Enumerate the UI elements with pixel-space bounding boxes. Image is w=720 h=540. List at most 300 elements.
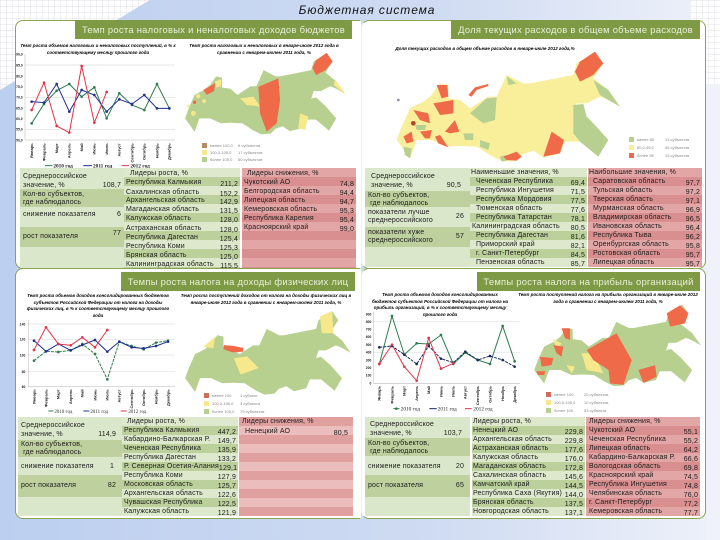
row header: Лидеры снижения, % (589, 418, 661, 425)
table: decline leaders: 99,0 (340, 226, 354, 232)
line chart: tax revenue growth by month: 60,0 (16, 117, 23, 121)
line chart: personal income tax by month: Январь (31, 389, 36, 404)
table: growth leaders: 127,9 (218, 474, 236, 480)
table: lowest values: г. Санкт-Петербург (476, 250, 539, 257)
table: highest values: 96,5 (686, 216, 700, 222)
table: growth leaders: Республика Коми (124, 472, 183, 479)
line chart: personal income tax by month: 2012 год (128, 410, 147, 415)
table: growth leaders: 176,0 (565, 456, 583, 462)
map: corporate profit tax by region (534, 305, 701, 386)
table: decline leaders (586, 417, 700, 516)
stat: growth count: 82 (108, 482, 116, 489)
line chart: personal income tax by month: Ноябрь (153, 389, 158, 404)
legend: tax revenue map: 60 субъектов (238, 157, 262, 162)
line chart: personal income tax by month: 2010 год (54, 410, 73, 415)
table: lowest values (470, 168, 587, 267)
line chart: tax revenue growth by month: Сентябрь (129, 143, 134, 162)
table: lowest values: Республика Татарстан (476, 214, 552, 221)
table: growth leaders: Астраханская область (126, 225, 202, 232)
line chart: corporate profit tax by month: 2011 год (438, 406, 457, 412)
table: highest values: Ростовская область (593, 250, 660, 257)
line chart: tax revenue growth by month: 55,0 (16, 128, 23, 132)
stat: regions observed: где наблюдалось (370, 200, 428, 207)
table: growth leaders: Брянская область (473, 499, 534, 506)
line chart: personal income tax by month: Сентябрь (129, 389, 134, 408)
table: growth leaders: 145,6 (565, 474, 583, 480)
stat: national average: 114,9 (98, 431, 116, 438)
legend: expenditure map: 13 субъектов (665, 137, 689, 142)
line chart: personal income tax by month: Февраль (43, 389, 48, 407)
line chart: corporate profit tax by month: Июль (451, 385, 456, 397)
line chart: personal income tax by month: 80 (22, 370, 25, 374)
table: growth leaders: Кабардино-Балкарская Р. (124, 436, 210, 443)
table: growth leaders (472, 417, 585, 516)
panel: personal income tax (15, 268, 361, 519)
table: growth leaders: Республика Коми (126, 243, 185, 250)
legend: personal income tax map (204, 393, 264, 414)
table: growth leaders: Сахалинская область (473, 472, 546, 479)
table: decline leaders: Чукотский АО (244, 179, 290, 186)
table: expenditure summary (365, 168, 470, 267)
table: highest values: Ивановская область (593, 223, 662, 230)
stat: growth count: 65 (456, 482, 464, 489)
row header: Наименьшие значения, % (471, 169, 559, 176)
table: growth leaders: Калужская область (126, 215, 191, 222)
stat: better than average: показатели лучше (368, 209, 430, 216)
legend: expenditure map: 55 субъектов (665, 145, 689, 150)
heading: current expenditure share (451, 20, 700, 39)
line chart: corporate profit tax by month: 700 (366, 328, 371, 332)
line chart: personal income tax by month: Май (80, 389, 85, 397)
table: decline leaders: Челябинская область (589, 490, 662, 497)
table: highest values: Республика Тыва (593, 232, 652, 239)
table: growth leaders: Калининградская область (126, 261, 214, 268)
line chart: corporate profit tax by month: 2012 год (473, 406, 493, 412)
table: decline leaders: Ненецкий АО (245, 428, 290, 435)
table: growth leaders: 129,1 (219, 464, 237, 472)
table: growth leaders: Республика Калмыкия (126, 179, 201, 186)
line chart: corporate profit tax by month: 600 (366, 335, 371, 339)
table: decline leaders: 76,0 (684, 492, 698, 498)
table: decline leaders: Кемеровская область (244, 206, 317, 213)
line chart: corporate profit tax by month: 2010 год (401, 406, 420, 412)
table: lowest values: Калининградская область (472, 223, 560, 230)
legend: personal income tax map: более 105,0 (212, 409, 235, 414)
stat: regions observed: где наблюдалось (23, 449, 81, 456)
table: growth leaders: Калужская область (473, 454, 538, 461)
table: highest values: 97,1 (686, 198, 700, 204)
line chart: corporate profit tax by month: 800 (366, 320, 371, 324)
stat: national average: Среднероссийское (370, 421, 434, 428)
legend: tax revenue map: 6 субъектов (238, 143, 260, 148)
line chart: corporate profit tax by month: Февраль (389, 385, 394, 404)
table: lowest values: Тюменская область (476, 205, 543, 212)
text: map subtitle bottom left: Темп роста поступлений доходов от налога на доходы физических лиц в январе-июле 2012 года в сравнении с январем-июлем 2011 года, % (181, 293, 351, 305)
table: growth leaders: Архангельская область (126, 197, 205, 204)
table: growth leaders: 128,0 (220, 216, 238, 224)
text: chart subtitle bottom right: Темп роста объемов доходов консолидированных бюджетов субъектов Российской Федерации от налога на прибыль организаций, в % к соответствующему месяцу прошлого года (372, 292, 508, 317)
table: decline leaders: Республика Ингушетия (589, 481, 667, 488)
table: growth leaders: Новгородская область (473, 508, 549, 515)
line chart: tax revenue growth by month: 90,0 (16, 52, 23, 56)
table: growth leaders: 149,7 (218, 438, 236, 444)
legend: expenditure map: 15 субъектов (665, 153, 689, 158)
table: decline leaders: Красноярский край (244, 224, 308, 231)
table: lowest values: 80,5 (571, 224, 585, 232)
table: growth leaders: Чеченская Республика (124, 445, 201, 452)
table: decline leaders: 74,8 (684, 482, 698, 490)
table: lowest values: Пензенская область (476, 259, 545, 266)
table: decline leaders (242, 168, 356, 268)
table: growth leaders: Республика Дагестан (124, 454, 196, 461)
stat: national average: Среднероссийское (21, 422, 85, 429)
table: lowest values: 71,5 (571, 188, 585, 196)
stat: national average: значение, % (23, 182, 65, 189)
stat: regions observed: Кол-во субъектов, (21, 441, 82, 448)
map: current expenditure share by region (397, 52, 620, 162)
line chart: tax revenue growth by month: Октябрь (142, 143, 147, 160)
table: highest values: 96,2 (686, 234, 700, 240)
line chart: tax revenue growth by month: 80,0 (16, 74, 23, 78)
table: growth leaders: Республика Калмыкия (124, 427, 199, 434)
legend: personal income tax map: 3 субъекта (240, 401, 261, 406)
table: lowest values: 84,5 (571, 252, 585, 258)
heading: corporate profit tax: Темпы роста налога на прибыль организаций (483, 276, 694, 287)
table: highest values: Липецкая область (593, 259, 654, 266)
row header: Лидеры снижения, % (247, 170, 319, 177)
stat: better than average: среднероссийского (368, 217, 433, 224)
table: lowest values: 81,6 (571, 234, 585, 240)
line chart: tax revenue growth by month: 50,0 (16, 138, 23, 142)
stat: decrease count: 6 (117, 211, 121, 218)
table: lowest values: Чеченская Республика (476, 178, 553, 185)
stat: national average (371, 172, 461, 189)
stat: national average: Среднероссийское (371, 173, 435, 180)
stat: regions observed: Кол-во субъектов, (368, 440, 429, 447)
panel: corporate profit tax (361, 268, 706, 519)
stat: decrease count: 1 (110, 463, 114, 470)
legend: tax revenue map: 17 субъектов (238, 150, 262, 155)
table: growth leaders: Московская область (124, 481, 193, 488)
table: growth leaders: Магаданская область (473, 463, 546, 470)
table: growth leaders (122, 417, 238, 516)
table: decline leaders: 74,8 (340, 180, 354, 188)
table: lowest values: 69,4 (571, 180, 585, 186)
stat: national average: 108,7 (103, 182, 121, 189)
line chart: tax revenue growth by month: 2012 год (130, 163, 150, 169)
text: map subtitle top left: Темп роста налоговых и неналоговых в январе-июле 2012 года в сравнении с январем-июлем 2011 года, % (189, 43, 339, 55)
line chart: tax revenue growth by month: Ноябрь (154, 143, 159, 158)
table: growth leaders: 144,0 (565, 492, 583, 498)
line chart: tax revenue growth by month: 2011 год (93, 163, 112, 169)
line chart: tax revenue growth by month: 2010 год (53, 163, 73, 169)
table: growth leaders: 131,5 (220, 208, 238, 214)
table: tax revenue summary (20, 168, 124, 268)
table: highest values: Оренбургская область (593, 241, 669, 248)
line chart: personal income tax by month: Апрель (68, 389, 73, 404)
table: decline leaders (239, 417, 353, 516)
table: decline leaders: Кабардино-Балкарская Р. (589, 454, 675, 461)
table: decline leaders: 77,2 (684, 500, 698, 508)
heading: personal income tax (121, 272, 355, 291)
table: highest values (588, 168, 702, 267)
table: decline leaders: 69,8 (684, 464, 698, 472)
map: tax revenue growth by region (185, 53, 346, 134)
line chart: corporate profit tax by month: Август (463, 386, 468, 399)
line chart: corporate profit tax by month: 200 (366, 366, 371, 370)
line chart: personal income tax by month: Декабрь (165, 389, 170, 406)
table: growth leaders: 125,0 (220, 254, 238, 260)
line chart: tax revenue growth by month: Март (54, 143, 59, 153)
legend: expenditure map: менее 80 (637, 137, 655, 142)
legend: tax revenue map (202, 143, 262, 162)
line chart: corporate profit tax by month: Март (402, 386, 407, 396)
line chart: corporate profit tax by month: Апрель (414, 385, 419, 401)
table: growth leaders: Брянская область (126, 252, 187, 259)
table: decline leaders: 94,4 (340, 190, 354, 196)
table: growth leaders: Ненецкий АО (473, 427, 518, 434)
stat: better than average: 26 (456, 213, 464, 220)
table: growth leaders: 152,2 (220, 190, 238, 198)
table: lowest values: 77,6 (571, 206, 585, 214)
legend: corporate profit tax map: менее 100 (554, 392, 574, 397)
line chart: corporate profit tax by month: Январь (377, 385, 382, 401)
stat: growth count (23, 230, 121, 240)
line chart: corporate profit tax by month: 500 (366, 343, 371, 347)
legend: personal income tax map: 1 субъект (240, 393, 258, 398)
table: growth leaders: 135,9 (218, 446, 236, 454)
line chart: tax revenue growth by month: Январь (29, 143, 34, 158)
table: decline leaders: Липецкая область (589, 445, 650, 452)
table: highest values: 95,7 (686, 252, 700, 258)
line chart: personal income tax by month: 2011 год (90, 410, 109, 415)
table: decline leaders: 66,6 (684, 456, 698, 462)
stat: worse than average: 57 (456, 233, 464, 240)
line chart: corporate profit tax by month: Июнь (438, 385, 443, 397)
line chart: tax revenue growth by month: Июнь (92, 143, 97, 154)
line chart: tax revenue growth by month: 85,0 (16, 63, 23, 67)
table: growth leaders: 125,3 (220, 244, 238, 252)
line chart: corporate profit tax by month (366, 312, 520, 412)
row header: Лидеры роста, % (130, 170, 188, 177)
table: highest values: Тульская область (593, 187, 653, 194)
line chart: corporate profit tax by month: 900 (366, 312, 371, 316)
table: lowest values: 77,5 (571, 198, 585, 204)
line chart: tax revenue growth by month: Май (79, 143, 84, 151)
line chart: corporate profit tax by month: 300 (366, 358, 371, 362)
table: decline leaders: Липецкая область (244, 197, 305, 204)
line chart: personal income tax by month: Октябрь (141, 389, 146, 406)
table: growth leaders: 122,5 (218, 500, 236, 508)
title: Бюджетная система (299, 3, 435, 17)
table: decline leaders: Вологодская область (589, 463, 661, 470)
table: growth leaders: 125,7 (218, 482, 236, 490)
line chart: corporate profit tax by month: Сентябрь (475, 385, 480, 405)
line chart: personal income tax by month: Июнь (92, 389, 97, 400)
table: decline leaders: г. Санкт-Петербург (589, 499, 652, 506)
stat: growth count: 77 (113, 230, 121, 237)
line chart: tax revenue growth by month: Февраль (41, 143, 46, 161)
line chart: corporate profit tax by month: Октябрь (487, 385, 492, 403)
heading: tax revenue growth (75, 20, 352, 39)
stat: better than average (368, 209, 464, 224)
text: chart subtitle top left: Темп роста объемов налоговых и неналоговых поступлений, в % к соответствующему месяцу прошлого года (20, 43, 176, 55)
text: chart subtitle bottom left: Темп роста объемов доходов консолидированных бюджетов субъектов Российской Федерации от налога на доходы физических лиц, в % к соответствующему месяцу прошлого года (27, 293, 169, 318)
table: growth leaders: Р. Северная Осетия-Алания (124, 463, 219, 470)
table: lowest values: Республика Ингушетия (476, 187, 554, 194)
line chart: tax revenue growth by month: Апрель (67, 143, 72, 158)
line chart: personal income tax by month (20, 320, 175, 415)
legend: corporate profit tax map: 20 субъектов (584, 392, 608, 397)
table: decline leaders: Республика Карелия (244, 215, 314, 222)
stat: national average (370, 420, 462, 437)
table: highest values: Саратовская область (593, 178, 665, 185)
table: decline leaders: 95,3 (340, 208, 354, 214)
table: growth leaders: 142,9 (220, 198, 238, 206)
table: growth leaders: Архангельская область (473, 436, 552, 443)
stat: national average: значение, % (371, 182, 413, 189)
heading: current expenditure share: Доля текущих расходов в общем объеме расходов (458, 24, 693, 35)
panel: tax revenue growth (15, 20, 361, 269)
table: growth leaders: Калужская область (124, 508, 189, 515)
table: decline leaders: Чукотский АО (589, 427, 635, 434)
table: decline leaders: 80,5 (334, 430, 348, 436)
legend: expenditure map (629, 137, 689, 158)
legend: expenditure map: более 95 (637, 153, 655, 158)
legend: corporate profit tax map: 53 субъекта (584, 408, 607, 413)
stat: growth count: рост показателя (368, 482, 423, 489)
legend: personal income tax map: 100,0-105,0 (212, 401, 234, 406)
table: lowest values: Республика Дагестан (476, 232, 548, 239)
stat: national average: значение, % (370, 430, 412, 437)
stat: decrease count: снижение показателя (21, 463, 94, 470)
line chart: personal income tax by month: Август (117, 389, 122, 403)
table: growth leaders: Чувашская Республика (124, 499, 203, 506)
stat: national average: 103,7 (444, 430, 462, 437)
text: map subtitle top right: Доля текущих расходов в общем объеме расходов в январе-июле 2012 года,% (395, 46, 575, 51)
table: highest values: Тверская область (593, 196, 653, 203)
table: growth leaders: 144,5 (565, 482, 583, 490)
table: growth leaders: 125,4 (220, 236, 238, 242)
line chart: personal income tax by month: 140 (20, 322, 25, 326)
table: growth leaders: 137,5 (565, 500, 583, 508)
line chart: personal income tax by month: Июль (105, 389, 110, 400)
line chart: corporate profit tax by month: Май (426, 385, 431, 394)
stat: growth count (368, 482, 464, 489)
row header: Наибольшие значения, % (589, 169, 676, 176)
table: lowest values: 82,1 (571, 242, 585, 250)
legend: tax revenue map: более 105,0 (210, 157, 233, 162)
table: growth leaders: Архангельская область (124, 490, 203, 497)
stat: national average: значение, % (21, 431, 63, 438)
table: growth leaders: 229,8 (565, 438, 583, 444)
table: lowest values: Республика Мордовия (476, 196, 552, 203)
table: profit tax summary (365, 417, 470, 516)
legend: corporate profit tax map: 10 субъектов (584, 400, 608, 405)
table: highest values: 96,4 (686, 224, 700, 232)
table: highest values: 95,8 (686, 242, 700, 250)
table: lowest values: Приморский край (476, 241, 535, 248)
table: decline leaders: Чеченская Республика (589, 436, 666, 443)
row header: Лидеры роста, % (127, 418, 185, 425)
stat: growth count (21, 482, 116, 489)
table: decline leaders: Красноярский край (589, 472, 653, 479)
legend: tax revenue map: менее 100,0 (210, 143, 234, 148)
legend: expenditure map: 80,0-95,0 (637, 145, 655, 150)
stat: national average (23, 172, 121, 189)
table: growth leaders: Республика Дагестан (126, 234, 198, 241)
table: growth leaders: Сахалинская область (126, 189, 199, 196)
line chart: corporate profit tax by month: Ноябрь (500, 385, 505, 401)
table: growth leaders: Астраханская область (473, 445, 549, 452)
stat: regions observed: где наблюдалось (23, 199, 81, 206)
table: growth leaders: 177,6 (565, 446, 583, 454)
line chart: tax revenue growth by month: 65,0 (16, 106, 23, 110)
heading: personal income tax: Темпы роста налога на доходы физических лиц (128, 276, 348, 287)
stat: national average (21, 422, 116, 438)
line chart: corporate profit tax by month: Декабрь (512, 385, 517, 403)
stat: regions observed (21, 440, 82, 456)
table: growth leaders: 172,8 (565, 464, 583, 472)
legend: corporate profit tax map (546, 392, 608, 413)
table: growth leaders: 211,2 (220, 180, 238, 188)
table: highest values: 96,9 (686, 206, 700, 214)
table: highest values: Мурманская область (593, 205, 664, 212)
stat: regions observed (23, 190, 84, 206)
table: highest values: 97,7 (686, 180, 700, 186)
table: lowest values: 78,1 (571, 216, 585, 222)
stat: regions observed: где наблюдалось (370, 448, 428, 455)
stat: worse than average: среднероссийского (368, 237, 433, 244)
table: growth leaders: Магаданская область (126, 206, 199, 213)
line chart: tax revenue growth by month: 75,0 (16, 85, 23, 89)
table: growth leaders: 122,6 (218, 492, 236, 498)
table: personal income tax summary (18, 417, 122, 516)
stat: worse than average (368, 229, 464, 244)
stat: regions observed (368, 191, 429, 207)
stat: regions observed (368, 439, 429, 455)
table: growth leaders: Республика Саха (Якутия) (473, 490, 562, 497)
line chart: corporate profit tax by month: 400 (366, 351, 371, 355)
panel: current expenditure share (361, 20, 706, 269)
legend: corporate profit tax map: более 105 (554, 408, 574, 413)
line chart: tax revenue growth by month: 70,0 (16, 96, 23, 100)
table: decline leaders: 94,7 (340, 198, 354, 206)
table: decline leaders: 55,1 (684, 428, 698, 436)
line chart: personal income tax by month: Март (56, 389, 61, 399)
legend: personal income tax map: 79 субъектов (240, 409, 264, 414)
table: decline leaders: Кемеровская область (589, 508, 662, 515)
table: highest values: Владимирская область (593, 214, 672, 221)
line chart: tax revenue growth by month: Август (117, 143, 122, 157)
table: decline leaders: 55,2 (684, 438, 698, 444)
row header: Лидеры снижения, % (242, 418, 314, 425)
table: decline leaders: 95,4 (340, 216, 354, 224)
stat: decrease count: снижение показателя (368, 463, 441, 470)
stat: growth count: рост показателя (21, 482, 76, 489)
table: growth leaders: 447,2 (218, 428, 236, 436)
stat: growth count: рост показателя (23, 233, 78, 240)
stat: regions observed: Кол-во субъектов, (368, 192, 429, 199)
heading: tax revenue growth: Темп роста налоговых и неналоговых доходов бюджетов (82, 24, 345, 35)
stat: national average: Среднероссийское (23, 173, 87, 180)
stat: decrease count: 20 (456, 463, 464, 470)
legend: personal income tax map: менее 100 (212, 393, 232, 398)
legend: tax revenue map: 100,0-105,0 (210, 150, 232, 155)
map: personal income tax by region (185, 311, 351, 395)
table: growth leaders: Камчатский край (473, 481, 530, 488)
table: growth leaders: 229,8 (565, 428, 583, 436)
